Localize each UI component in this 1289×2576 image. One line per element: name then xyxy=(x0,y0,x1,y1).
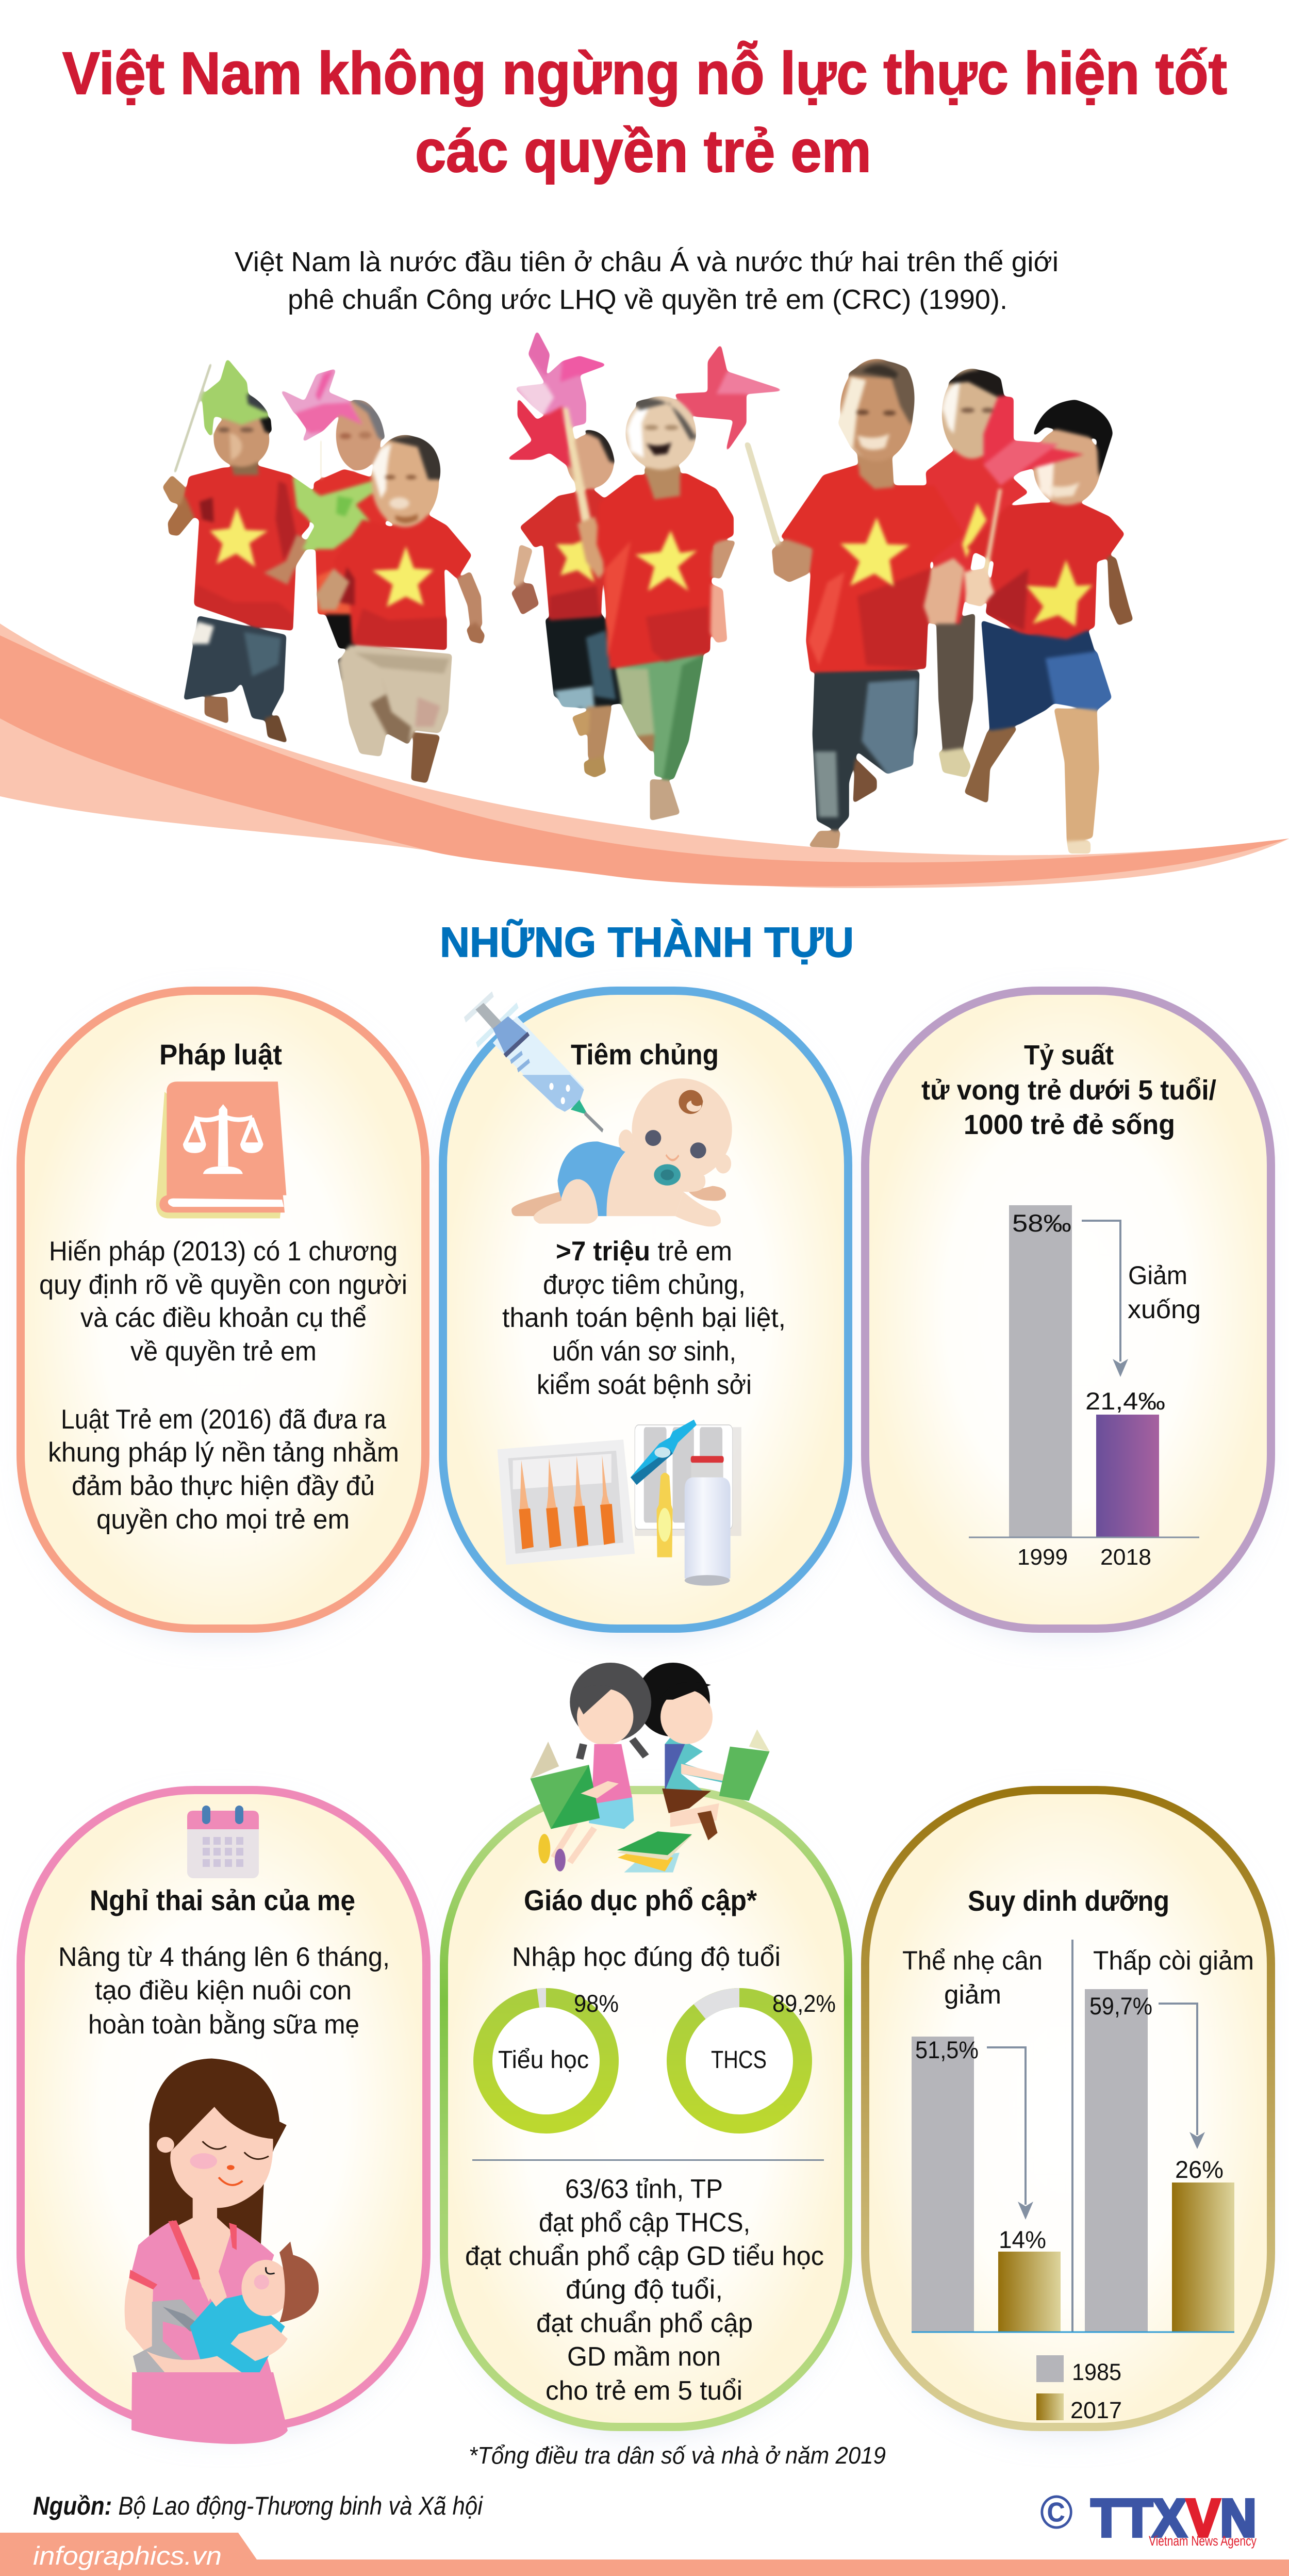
child 7 back xyxy=(936,613,975,751)
legend: 1985 xyxy=(1072,2359,1121,2385)
text: maternity leave xyxy=(58,1942,390,2040)
bar chart: malnutrition: 26% xyxy=(1175,2156,1224,2183)
illustration: children running with pinwheels xyxy=(162,330,1133,854)
intro text: phê chuẩn Công ước LHQ về quyền trẻ em (CRC) (1990). xyxy=(288,284,1007,315)
text: law details: về quyền trẻ em xyxy=(130,1336,317,1367)
donut: lower secondary 89,2%: THCS xyxy=(711,2046,767,2074)
text: maternity leave: hoàn toàn bằng sữa mẹ xyxy=(88,2010,359,2040)
text: maternity leave: tạo điều kiện nuôi con xyxy=(95,1976,352,2006)
illustration: mother breastfeeding xyxy=(125,2058,319,2444)
legend: 2017 xyxy=(1070,2397,1122,2423)
label: decrease: Giảm xyxy=(1128,1261,1187,1290)
panel: Pháp luật xyxy=(21,991,425,1630)
text: vaccination details: uốn ván sơ sinh, xyxy=(552,1336,736,1367)
panel title: Nghỉ thai sản của mẹ xyxy=(90,1884,355,1916)
text: universal education: đúng độ tuổi, xyxy=(566,2275,723,2305)
donut: lower secondary 89,2%: 89,2% xyxy=(772,1990,836,2017)
text: universal education xyxy=(465,2174,824,2406)
text: law details: khung pháp lý nền tảng nhằm xyxy=(48,1437,399,1468)
panel: Nghỉ thai sản của mẹ xyxy=(21,1790,426,2444)
panel title: Suy dinh dưỡng xyxy=(968,1884,1169,1917)
panel: Tỷ suất tử vong xyxy=(865,991,1271,1630)
text: law details: đảm bảo thực hiện đầy đủ xyxy=(72,1471,375,1501)
intro text xyxy=(235,247,1059,315)
bar chart: child mortality: 2018 xyxy=(1100,1545,1151,1570)
panel title xyxy=(921,1040,1216,1140)
footnote: *Tổng điều tra dân số và nhà ở năm 2019 xyxy=(469,2442,886,2469)
icon: law book with scales xyxy=(156,1081,286,1218)
panel title: tử vong trẻ dưới 5 tuổi/ xyxy=(921,1075,1216,1106)
text: vaccination details: thanh toán bệnh bại liệt, xyxy=(502,1303,786,1333)
bar chart: malnutrition: 59,7% xyxy=(1089,1992,1152,2020)
text: universal education: 63/63 tỉnh, TP xyxy=(565,2174,723,2204)
donut: primary school 98%: Tiểu học xyxy=(498,2046,589,2074)
text: universal education: đạt chuẩn phổ cập xyxy=(536,2308,753,2338)
text: law details: Hiến pháp (2013) có 1 chương xyxy=(49,1236,398,1267)
footer bar: infographics.vn xyxy=(33,2541,222,2570)
text: universal education: đạt chuẩn phổ cập GD tiểu học xyxy=(465,2241,824,2271)
source: Nguồn: Bộ Lao động-Thương binh và Xã hội xyxy=(33,2491,484,2520)
icon: crawling baby xyxy=(511,1078,732,1226)
label: underweight xyxy=(902,1946,1043,2009)
label: stunting: Thấp còi giảm xyxy=(1093,1946,1254,1975)
panel title: Pháp luật xyxy=(159,1038,282,1071)
children group left xyxy=(162,358,485,783)
text: vaccination details: kiểm soát bệnh sởi xyxy=(537,1370,752,1400)
panel: Giáo dục phổ cập xyxy=(444,1663,848,2427)
panel title: Tiêm chủng xyxy=(571,1038,719,1071)
icon: calendar xyxy=(187,1806,259,1878)
footer bar xyxy=(0,2533,1289,2576)
illustration: children reading books xyxy=(530,1663,770,1873)
arrow: decrease xyxy=(1082,1221,1128,1377)
child 5 xyxy=(616,655,703,779)
bar chart: child mortality xyxy=(969,1205,1201,1570)
bar chart: malnutrition xyxy=(912,1989,1234,2332)
panel title: Giáo dục phổ cập* xyxy=(524,1884,757,1916)
bar chart: malnutrition: 51,5% xyxy=(915,2036,979,2063)
label: decrease xyxy=(1128,1261,1201,1324)
panel: Suy dinh dưỡng xyxy=(865,1790,1271,2427)
child 4 xyxy=(546,615,622,709)
text: vaccination details: được tiêm chủng, xyxy=(543,1270,746,1300)
title xyxy=(62,40,1227,185)
legend xyxy=(1036,2355,1122,2423)
donut: primary school 98% xyxy=(483,1990,619,2124)
arrow: underweight decrease xyxy=(987,2047,1033,2220)
text: universal education: đạt phổ cập THCS, xyxy=(539,2208,750,2238)
text: maternity leave: Nâng từ 4 tháng lên 6 tháng, xyxy=(58,1942,390,1972)
bar chart: child mortality: 1999 xyxy=(1017,1545,1068,1570)
logo: TTXVN: © xyxy=(1040,2486,1073,2539)
label: underweight: giảm xyxy=(944,1980,1001,2009)
donut: primary school 98%: 98% xyxy=(574,1990,619,2017)
icon: ampoule trays and vial xyxy=(498,1420,741,1586)
child 6 xyxy=(772,537,813,582)
text: law details: quyền cho mọi trẻ em xyxy=(96,1504,350,1535)
text: law details: quy định rõ về quyền con người xyxy=(39,1270,407,1300)
icon: syringe xyxy=(465,994,603,1131)
bar chart: child mortality: 58‰ xyxy=(1012,1209,1071,1237)
bar chart: child mortality: 21,4‰ xyxy=(1085,1387,1165,1415)
panel title: 1000 trẻ đẻ sống xyxy=(964,1109,1175,1140)
bar chart: malnutrition: 14% xyxy=(999,2226,1046,2253)
children group right xyxy=(506,330,1133,854)
panel title: Tỷ suất xyxy=(1024,1040,1114,1071)
logo: TTXVN: Vietnam News Agency xyxy=(1149,2533,1257,2549)
title: các quyền trẻ em xyxy=(415,118,871,185)
text: universal education: GD mầm non xyxy=(567,2342,721,2372)
text: vaccination details xyxy=(502,1236,786,1400)
arrow: stunting decrease xyxy=(1159,2004,1205,2149)
text: universal education: cho trẻ em 5 tuổi xyxy=(546,2376,742,2406)
text: law details: Luật Trẻ em (2016) đã đưa ra xyxy=(61,1404,386,1435)
title: Việt Nam không ngừng nỗ lực thực hiện tốt xyxy=(62,40,1227,107)
section heading: NHỮNG THÀNH TỰU xyxy=(440,919,854,966)
text: vaccination details: >7 triệu trẻ em xyxy=(556,1236,732,1267)
label: decrease: xuống xyxy=(1128,1295,1201,1324)
intro text: Việt Nam là nước đầu tiên ở châu Á và nước thứ hai trên thế giới xyxy=(235,247,1059,277)
text: law details: và các điều khoản cụ thể xyxy=(80,1303,367,1333)
panel: Tiêm chủng xyxy=(443,991,848,1630)
swoosh wave xyxy=(0,624,1289,888)
logo: TTXVN: TTXVN xyxy=(1091,2488,1257,2548)
text: enrolment heading: Nhập học đúng độ tuổi xyxy=(512,1942,781,1972)
child 8 xyxy=(981,620,1112,732)
donut: lower secondary 89,2% xyxy=(676,1990,836,2124)
label: underweight: Thể nhẹ cân xyxy=(902,1946,1043,1975)
text: law details xyxy=(39,1236,407,1535)
